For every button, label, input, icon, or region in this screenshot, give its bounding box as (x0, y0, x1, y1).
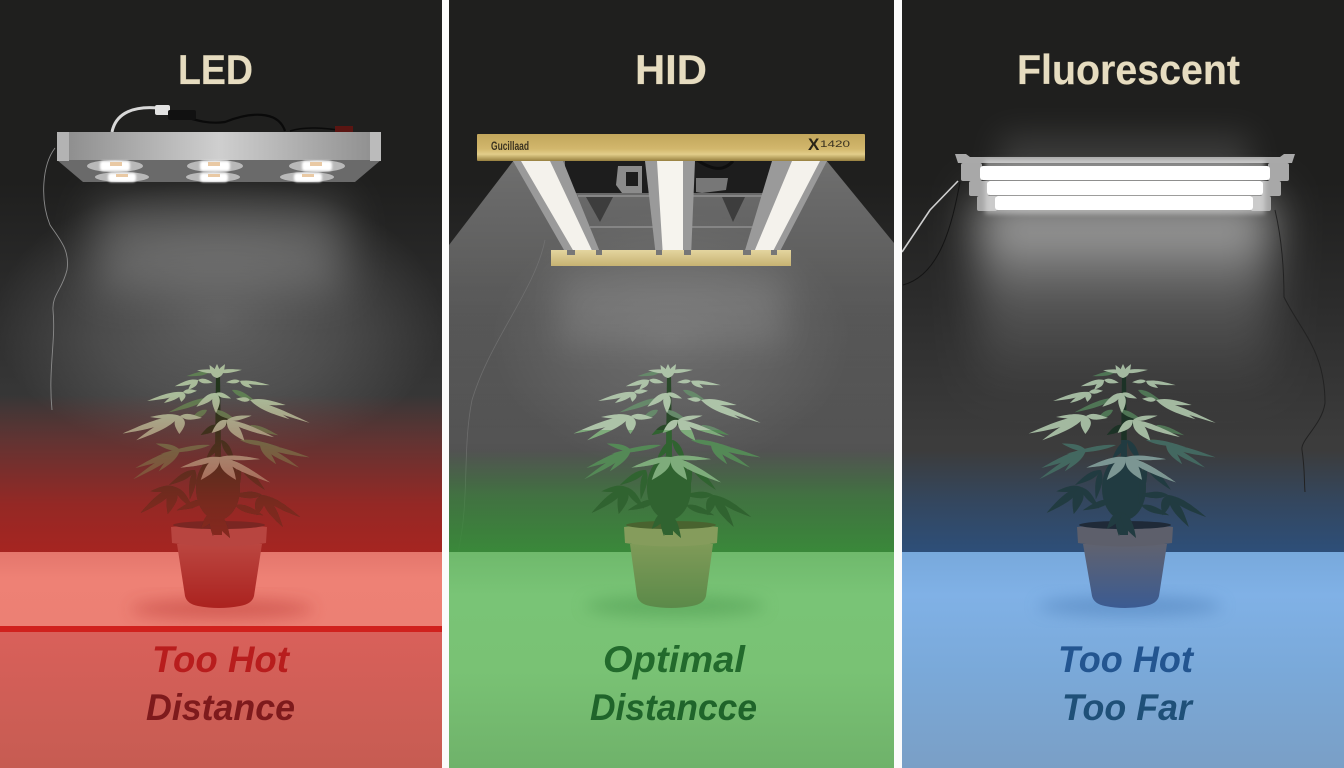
logo text: Gucillaad (491, 139, 529, 153)
flower pot (1077, 521, 1173, 608)
housing (955, 154, 1295, 163)
left bar (513, 161, 602, 257)
heading: HID: HID (635, 46, 707, 93)
label: Too Hot: Too Hot (152, 639, 291, 680)
tubes (980, 166, 1270, 210)
central glow (548, 266, 794, 430)
wall (449, 0, 894, 552)
faint wall wire (464, 240, 546, 516)
lower gold bar (551, 250, 791, 266)
red heat tint on wall (0, 395, 442, 552)
bar feet (567, 250, 777, 255)
wall (0, 0, 442, 552)
lower floor band (0, 632, 442, 768)
light glow under tubes (978, 200, 1272, 390)
plug and switch (155, 105, 170, 115)
tube halo (985, 160, 1265, 214)
blue tint on wall (902, 450, 1344, 552)
label: Optimal: Optimal (603, 639, 746, 680)
cannabis plant (122, 363, 311, 540)
cannabis plant (573, 363, 762, 540)
faint glow above tubes (1000, 135, 1250, 180)
panel: Fluorescent (902, 0, 1344, 768)
blue tint over plant (902, 440, 1344, 555)
red tint over plant (124, 404, 309, 538)
beams below lower bar (560, 275, 785, 345)
floor (0, 552, 442, 626)
label: Distance: Distance (146, 687, 295, 728)
right bar (743, 161, 827, 257)
heading: Fluorescent: Fluorescent (1017, 46, 1240, 93)
LED hot spots (100, 161, 332, 182)
floor (902, 552, 1344, 768)
model number: 1420 (820, 139, 850, 149)
label: Too Far: Too Far (1062, 687, 1195, 728)
HID fixture (477, 134, 865, 266)
upper gold bar (477, 134, 865, 161)
wall (902, 0, 1344, 552)
LED beam highlights (95, 200, 345, 290)
label: Distancce: Distancce (590, 687, 757, 728)
rails (578, 196, 767, 227)
red distance line (0, 626, 442, 632)
pot shadow (1038, 596, 1222, 616)
fluorescent fixture (902, 154, 1325, 492)
power cables (44, 108, 345, 410)
LED lamp rings (87, 160, 345, 182)
center bar (645, 161, 695, 257)
green tint on wall (449, 461, 894, 552)
pot shadow (585, 596, 765, 616)
dark recess behind bars (565, 161, 775, 193)
flower pot (624, 521, 718, 608)
end clips (961, 163, 1289, 211)
flower pot (171, 521, 267, 608)
model X: X (808, 135, 820, 154)
dark wedges between bars (586, 197, 745, 222)
label: Too Hot: Too Hot (1058, 639, 1195, 680)
warm LED diodes (110, 162, 322, 177)
heading: LED: LED (178, 46, 253, 93)
floor (449, 552, 894, 768)
tray (57, 160, 381, 182)
housing (57, 132, 381, 160)
pot shadow (130, 599, 314, 619)
panel: LED (0, 0, 444, 768)
light glow under LED fixture (26, 199, 412, 432)
panel: HID (449, 0, 894, 768)
green tint over plant (574, 430, 759, 538)
mounting bracket (616, 166, 642, 193)
LED fixture (44, 105, 381, 410)
cannabis plant (1028, 363, 1217, 540)
wires (902, 181, 1325, 492)
light cone (449, 161, 894, 492)
end caps (57, 132, 69, 161)
